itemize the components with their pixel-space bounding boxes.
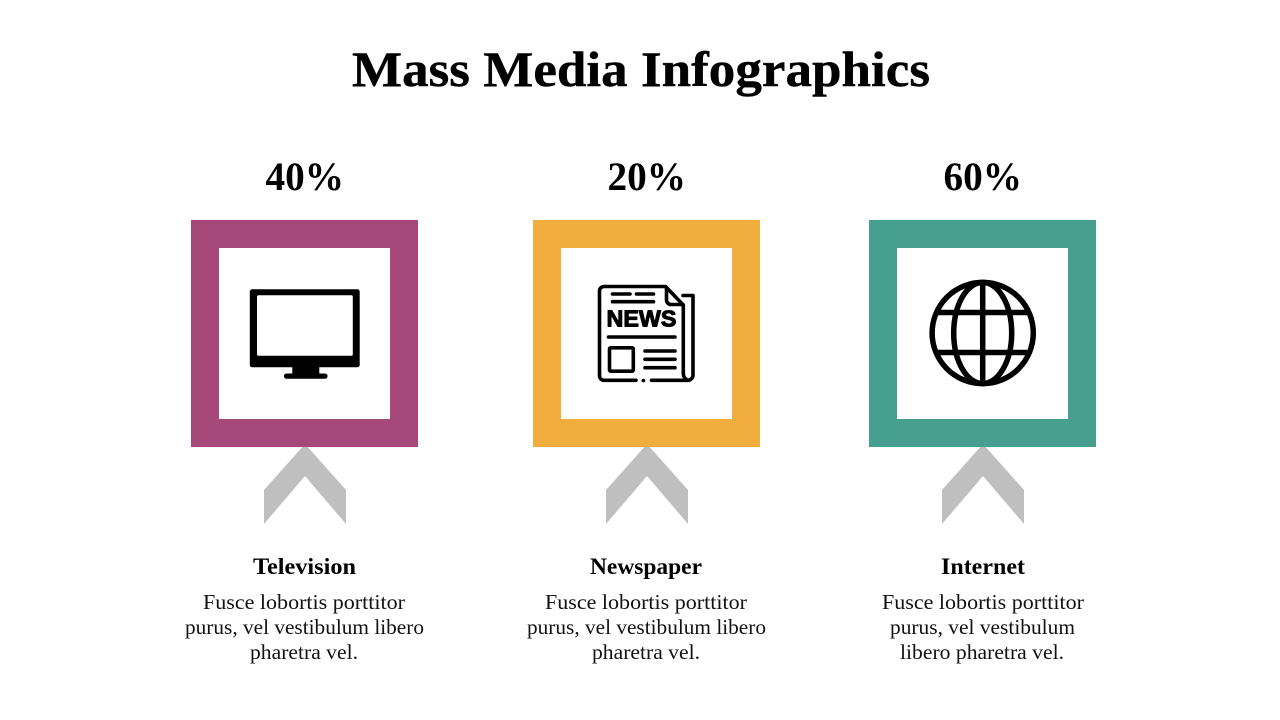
- icon: newspaper: [600, 286, 693, 380]
- description: newspaper: [527, 590, 766, 664]
- panel: newspaper: [527, 154, 766, 664]
- coloured frame: [869, 220, 1096, 447]
- chevron arrow: [942, 444, 1024, 524]
- panel: internet: [869, 154, 1096, 664]
- description: television: pharetra vel.: [250, 640, 358, 664]
- heading: internet: Internet: [941, 554, 1025, 579]
- heading: television: Television: [253, 554, 356, 579]
- description: television: purus, vel vestibulum libero: [185, 615, 424, 639]
- description: newspaper: pharetra vel.: [592, 640, 700, 664]
- icon: television: [250, 289, 360, 379]
- heading: newspaper: Newspaper: [590, 554, 702, 579]
- description: internet: libero pharetra vel.: [900, 640, 1064, 664]
- coloured frame: [533, 220, 760, 447]
- icon: globe: [932, 282, 1033, 384]
- NEWS lettering: NEWS: [606, 306, 676, 332]
- coloured frame: [191, 220, 418, 447]
- percentage: 60%: 60%: [944, 154, 1022, 199]
- title: Mass Media Infographics: [352, 41, 930, 97]
- description: television: [185, 590, 424, 664]
- description: newspaper: Fusce lobortis porttitor: [545, 590, 747, 614]
- description: internet: purus, vel vestibulum: [890, 615, 1075, 639]
- chevron arrow: [606, 444, 688, 524]
- chevron arrow: [264, 444, 346, 524]
- description: internet: Fusce lobortis porttitor: [882, 590, 1084, 614]
- percentage: 40%: 40%: [266, 154, 344, 199]
- description: internet: [882, 590, 1084, 664]
- percentage: 20%: 20%: [608, 154, 686, 199]
- description: newspaper: purus, vel vestibulum libero: [527, 615, 766, 639]
- panel: television: [185, 154, 424, 664]
- description: television: Fusce lobortis porttitor: [203, 590, 405, 614]
